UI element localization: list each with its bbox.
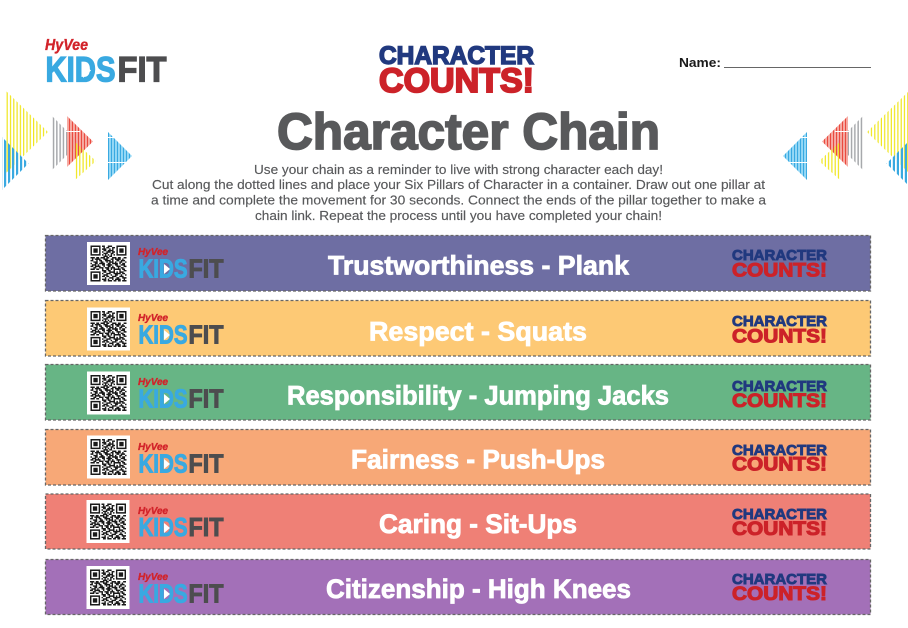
- KidsFit logo: [138, 571, 224, 608]
- Character Counts logo: CHARACTER: [732, 313, 827, 330]
- KidsFit logo: [138, 312, 224, 350]
- strip: Responsibility - Jumping Jacks: [46, 364, 870, 420]
- strip title: Citizenship - High Knees: [326, 574, 631, 604]
- QR code: [86, 500, 130, 543]
- KidsFit wordmark: KIDS: [46, 50, 116, 90]
- right triangle decoration: [783, 90, 908, 190]
- strip title: Responsibility - Jumping Jacks: [287, 380, 669, 410]
- instructions text: Cut along the dotted lines and place your Six Pillars of Character in a container. Draw out one pillar at: [152, 178, 766, 192]
- KidsFit logo: [138, 441, 224, 478]
- KidsFit logo: KIDS: [138, 578, 188, 608]
- Character Counts logo: COUNTS!: [732, 326, 827, 348]
- instructions text: Use your chain as a reminder to live with strong character each day!: [254, 163, 663, 177]
- strip: Trustworthiness - Plank: [46, 236, 870, 291]
- KidsFit logo: HyVee: [138, 505, 168, 517]
- Character Counts logo: [732, 247, 827, 282]
- instructions text: a time and complete the movement for 30 seconds. Connect the ends of the pillar together to make a: [151, 194, 766, 208]
- strip: Respect - Squats: [46, 300, 870, 356]
- Character Counts logo: [732, 571, 827, 605]
- Character Counts logo: CHARACTER: [379, 42, 534, 70]
- KidsFit logo: FIT: [188, 254, 224, 284]
- Character Counts logo: COUNTS!: [732, 518, 827, 540]
- strip: Fairness - Push-Ups: [46, 430, 870, 485]
- Character Counts logo: [732, 506, 827, 540]
- strip: Citizenship - High Knees: [46, 560, 870, 614]
- QR code: [87, 372, 130, 414]
- Character Counts logo: [732, 313, 827, 348]
- strip title: Caring - Sit-Ups: [379, 509, 577, 539]
- Character Counts logo: CHARACTER: [732, 571, 827, 588]
- Character Counts logo: [379, 42, 534, 100]
- Character Counts logo: COUNTS!: [732, 260, 827, 282]
- strip: Caring - Sit-Ups: [46, 494, 870, 549]
- strip title: Fairness - Push-Ups: [351, 444, 605, 474]
- Character Counts logo: CHARACTER: [732, 378, 827, 395]
- KidsFit logo: [138, 505, 224, 542]
- Character Counts logo: [732, 442, 827, 476]
- Character Counts logo: COUNTS!: [379, 62, 534, 100]
- strip title: Trustworthiness - Plank: [328, 250, 629, 280]
- KidsFit logo: KIDS: [138, 512, 188, 542]
- KidsFit logo: HyVee: [138, 376, 168, 388]
- instructions text: [151, 163, 766, 223]
- Hy-Vee wordmark: HyVee: [45, 37, 88, 54]
- KidsFit logo: HyVee: [138, 312, 168, 324]
- KidsFit logo: KIDS: [138, 448, 188, 478]
- KidsFit logo: HyVee: [138, 246, 168, 258]
- KidsFit logo: HyVee: [138, 441, 168, 453]
- KidsFit logo: [138, 246, 224, 284]
- Character Counts logo: CHARACTER: [732, 506, 827, 523]
- KidsFit wordmark: [46, 50, 166, 90]
- KidsFit logo: FIT: [188, 448, 224, 478]
- KidsFit wordmark: FIT: [118, 50, 166, 90]
- KidsFit logo: KIDS: [138, 254, 188, 284]
- strip title: Respect - Squats: [369, 316, 587, 346]
- KidsFit logo: [138, 376, 224, 414]
- KidsFit logo: KIDS: [138, 384, 188, 414]
- Character Counts logo: [732, 378, 827, 412]
- QR code: [86, 566, 130, 609]
- QR code: [87, 308, 130, 350]
- KidsFit logo: FIT: [188, 384, 224, 414]
- KidsFit logo: FIT: [188, 320, 224, 350]
- QR code: [87, 436, 130, 478]
- left triangle decoration: [2, 90, 132, 190]
- Character Counts logo: CHARACTER: [732, 442, 827, 459]
- name field: Name:: [679, 55, 721, 70]
- QR code: [87, 242, 130, 285]
- KidsFit logo: HyVee: [138, 571, 168, 583]
- KidsFit logo: KIDS: [138, 320, 188, 350]
- Hy-Vee KidsFit logo: [45, 37, 166, 90]
- Character Counts logo: COUNTS!: [732, 454, 827, 476]
- title: Character Chain: [277, 103, 660, 160]
- KidsFit logo: FIT: [188, 512, 224, 542]
- Character Counts logo: COUNTS!: [732, 583, 827, 605]
- Character Counts logo: COUNTS!: [732, 390, 827, 412]
- Character Counts logo: CHARACTER: [732, 247, 827, 264]
- instructions text: chain link. Repeat the process until you have completed your chain!: [255, 209, 662, 223]
- KidsFit logo: FIT: [188, 578, 224, 608]
